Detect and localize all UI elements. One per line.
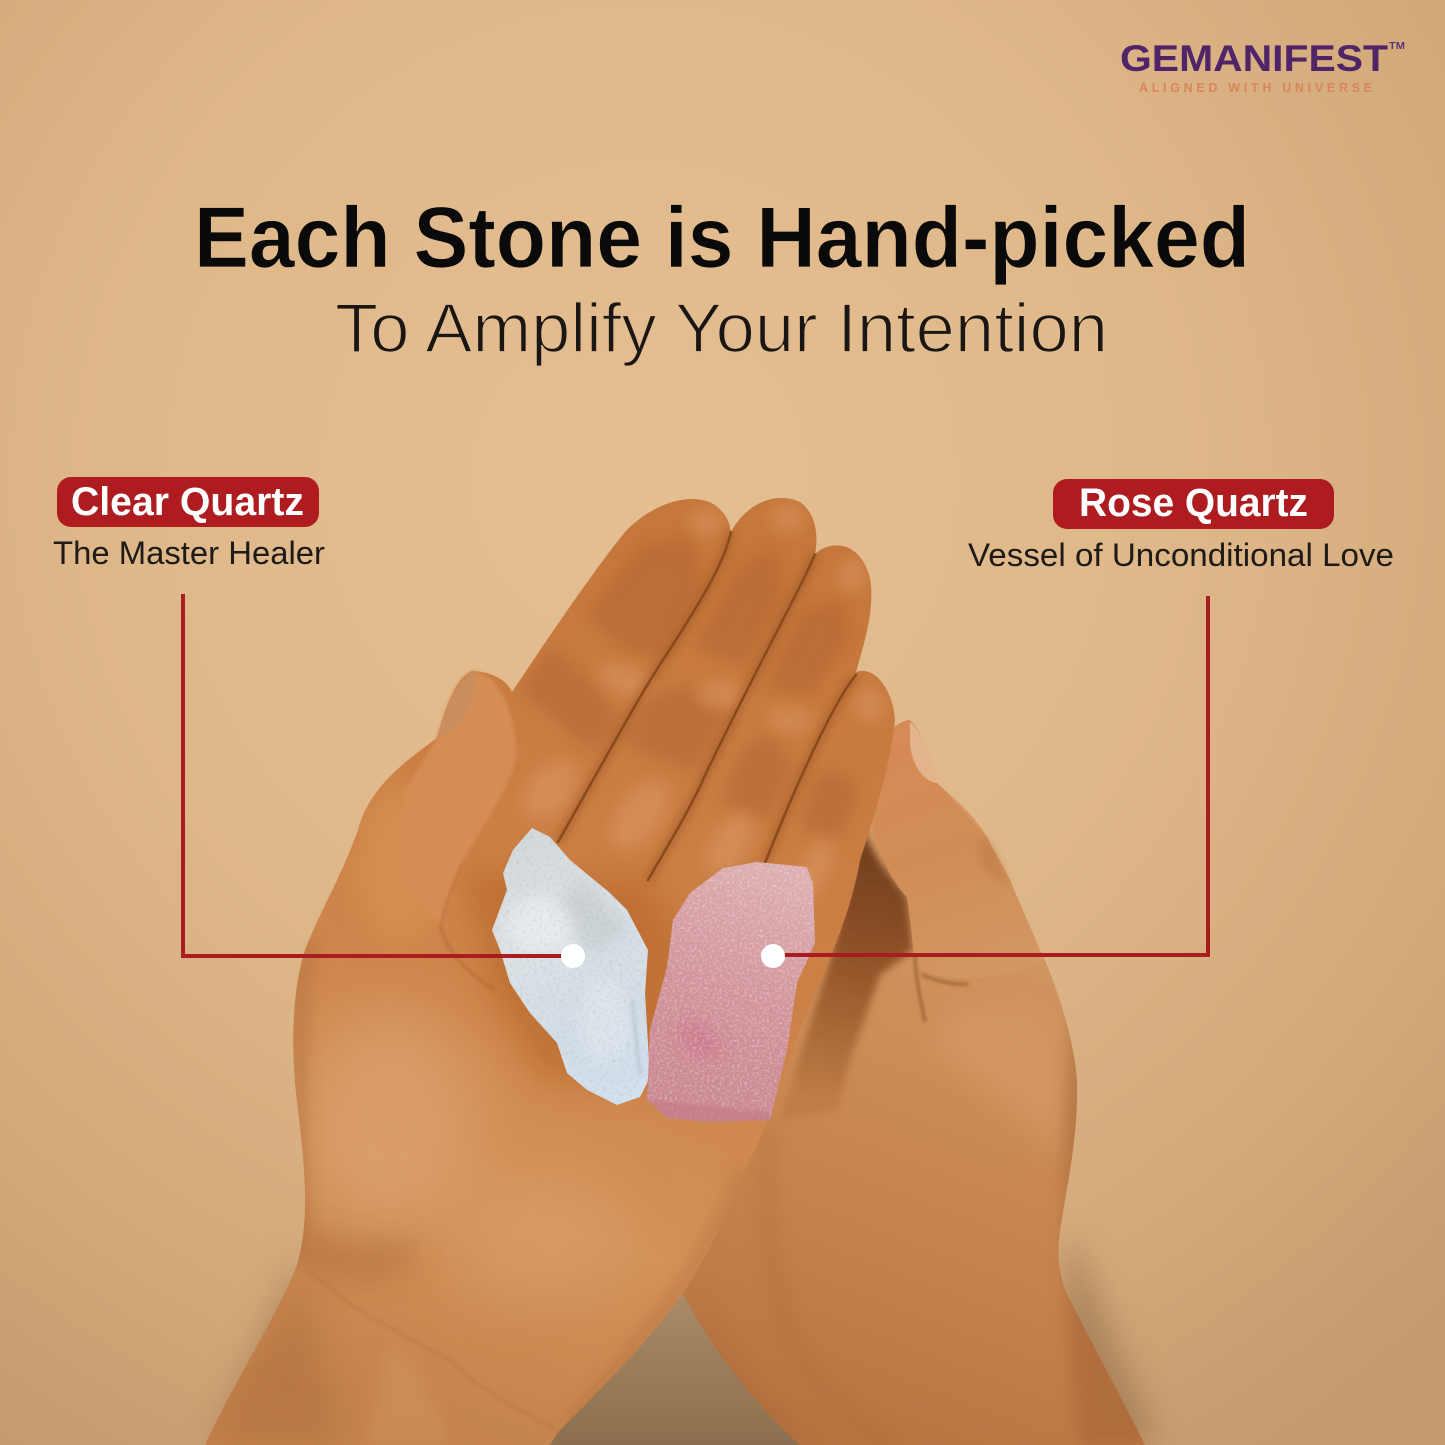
- callout: rose quartz: [761, 479, 1394, 968]
- outer palm edge shading: [296, 940, 312, 1260]
- thumb knuckle: [979, 835, 1010, 885]
- subtitle: To Amplify Your Intention: [335, 289, 1108, 367]
- logo: [1120, 38, 1405, 95]
- description: The Master Healer: [53, 535, 325, 571]
- left hand: [205, 498, 895, 1445]
- marker dot: [761, 944, 785, 968]
- thumbnail right: [910, 722, 937, 783]
- connector line: [183, 594, 565, 956]
- label name: Clear Quartz: [71, 480, 304, 524]
- marker dot: [561, 944, 585, 968]
- palm highlights: [305, 1010, 475, 1230]
- callout: clear quartz: [53, 477, 585, 968]
- wrist crease: [309, 1271, 558, 1432]
- thumbnail left: [438, 672, 475, 738]
- description: Vessel of Unconditional Love: [968, 537, 1394, 573]
- right hand: [683, 720, 1150, 1445]
- logo tagline: ALIGNED WITH UNIVERSE: [1139, 81, 1372, 95]
- label pill: [57, 477, 319, 527]
- connector line: [781, 596, 1208, 955]
- palm cup shadow: [465, 870, 690, 1090]
- finger gaps: [558, 532, 856, 880]
- stone: rose quartz: [645, 860, 820, 1125]
- hand shadow: [210, 1230, 1160, 1445]
- thumb inner edge: [438, 882, 494, 990]
- label pill: [1053, 479, 1334, 529]
- title: Each Stone is Hand-picked: [194, 190, 1250, 286]
- finger pads: [520, 535, 860, 838]
- stone: clear quartz: [490, 825, 655, 1110]
- finger light tips: [511, 504, 885, 905]
- trademark: TM: [1389, 41, 1405, 52]
- left thumb: [400, 671, 517, 925]
- thumb base crease: [915, 955, 968, 1022]
- wrist band shadow: [298, 1240, 410, 1262]
- logo wordmark: GEMANIFEST: [1120, 38, 1388, 79]
- illustration: cupped hands holding stones: [205, 498, 1150, 1445]
- label name: Rose Quartz: [1079, 481, 1308, 525]
- right thumb: [868, 720, 1042, 978]
